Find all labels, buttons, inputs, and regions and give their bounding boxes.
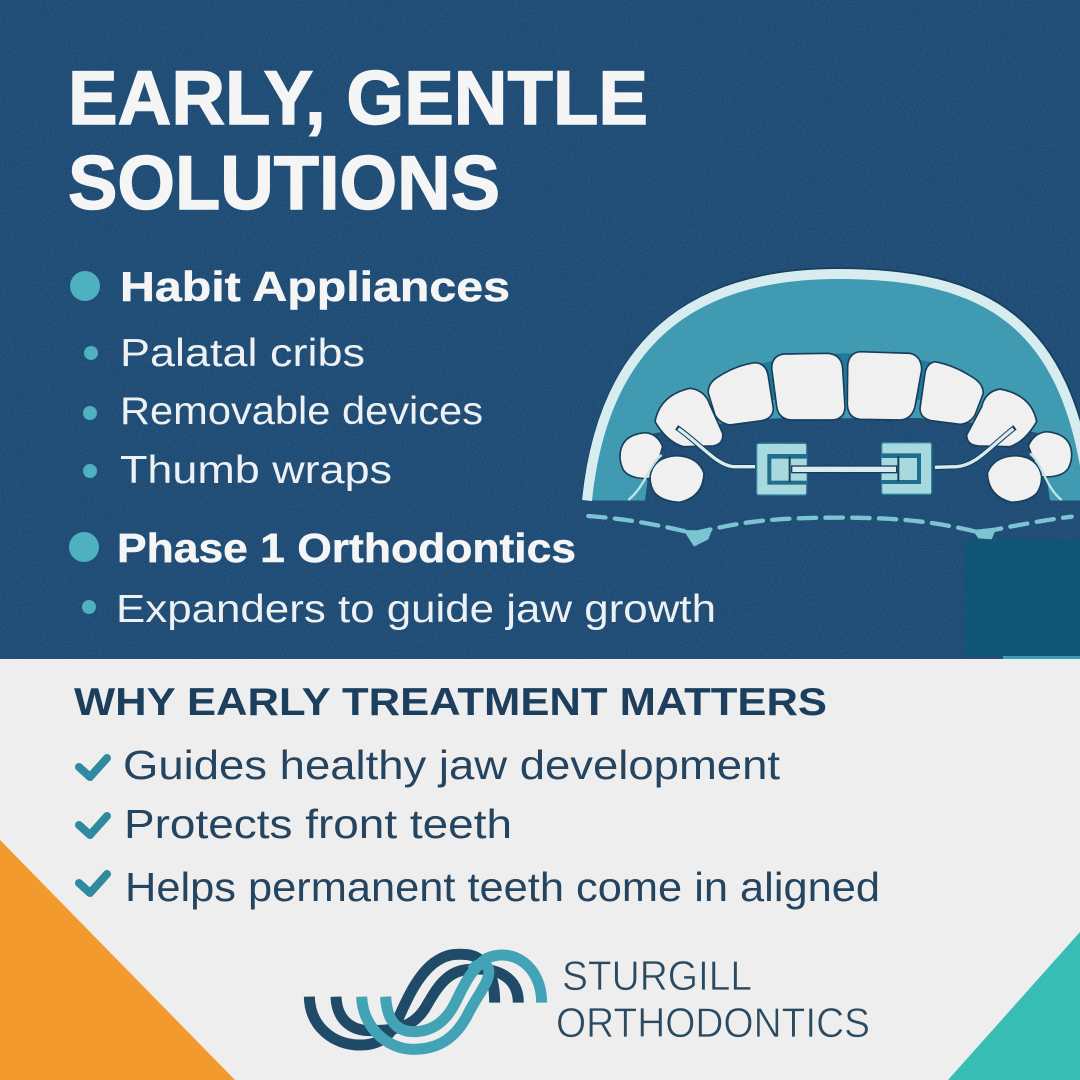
wire: left arm highlight [678, 429, 755, 467]
wire: left arm [677, 427, 755, 467]
wire: right arm highlight [935, 429, 1013, 467]
logo text: sturgill: STURGILL [562, 952, 752, 999]
teal strip [1003, 656, 1080, 659]
gum fill [587, 274, 1080, 500]
illustration: teeth and expander [588, 352, 1072, 547]
wire: right molar clasp [1030, 453, 1062, 500]
wire: left molar clasp [628, 455, 662, 500]
panel: top blue background [0, 0, 1080, 659]
item: removable devices: Removable devices [120, 390, 483, 433]
teeth [620, 352, 1072, 502]
teal outer wave [362, 964, 489, 1049]
title: EARLY, GENTLE [68, 56, 648, 141]
wires to molars [628, 427, 1062, 500]
panel: bottom light background [0, 659, 1080, 1080]
bracket slot [882, 453, 921, 484]
bullet: expanders [82, 600, 96, 614]
corner: teal triangle [948, 932, 1080, 1080]
heading: phase 1 orthodontics: Phase 1 Orthodontics [117, 525, 576, 571]
dark teal rectangle [965, 540, 1080, 656]
bracket block [771, 459, 807, 481]
heading: why early treatment matters: WHY EARLY TREATMENT MATTERS [74, 681, 827, 724]
tooth: right front molar [987, 456, 1042, 502]
illustration: gum arch [582, 268, 1080, 500]
tooth: right lateral [920, 362, 983, 424]
tooth: right central [847, 352, 922, 420]
bullet: habit appliances [70, 271, 100, 301]
icon: check 1 [79, 758, 107, 777]
tooth: right canine [967, 389, 1037, 447]
bullet: phase 1 orthodontics [69, 532, 99, 562]
palate [645, 417, 1050, 501]
item: expanders: Expanders to guide jaw growth [116, 588, 716, 631]
dashed line [588, 516, 1072, 533]
section: habit appliances list [70, 263, 510, 492]
right arrowhead [973, 527, 997, 539]
corner: orange triangle [0, 840, 235, 1080]
icon: check 3 [79, 874, 107, 893]
tooth: left lateral [708, 363, 773, 425]
dark outer wave [309, 954, 495, 1045]
bullet: thumb wraps [83, 464, 97, 478]
tooth: left canine [655, 388, 723, 447]
dark inner wave [336, 969, 518, 1031]
bracket block [882, 458, 917, 480]
dashed growth arrow [588, 516, 1072, 547]
item: thumb wraps: Thumb wraps [120, 449, 392, 492]
wire: right arm [935, 427, 1015, 467]
logo mark [309, 954, 542, 1049]
item: helps permanent teeth come in aligned: Helps permanent teeth come in aligned [125, 864, 880, 910]
icon: check 2 [79, 816, 107, 835]
logo: sturgill orthodontics [309, 952, 870, 1049]
bracket divider [897, 456, 899, 481]
tooth: left back molar [620, 433, 663, 479]
section: phase 1 orthodontics list [69, 525, 716, 631]
tooth: right back molar [1028, 432, 1072, 477]
bracket divider [789, 457, 791, 482]
bullet: removable devices [83, 406, 97, 420]
checklist [79, 742, 880, 910]
teal inner wave [386, 955, 542, 1032]
bracket frame [882, 443, 932, 494]
expander left bracket [757, 443, 807, 495]
tooth: left front molar [650, 456, 704, 502]
item: protects front teeth: Protects front teeth [124, 801, 512, 847]
heading: habit appliances: Habit Appliances [120, 263, 510, 310]
shadow behind front teeth [737, 353, 963, 400]
logo text: orthodontics: ORTHODONTICS [556, 999, 870, 1046]
expander right bracket [882, 443, 932, 494]
title [68, 56, 648, 226]
item: palatal cribs: Palatal cribs [120, 332, 365, 375]
arch dark outline [582, 268, 1080, 500]
bracket slot [767, 454, 807, 485]
bracket frame [757, 443, 807, 495]
expander screw bar [792, 466, 897, 473]
left arrowhead [683, 530, 712, 547]
title: SOLUTIONS [68, 141, 500, 226]
bullet: palatal cribs [84, 346, 98, 360]
tooth: left central [772, 353, 845, 420]
arch light rim [587, 274, 1080, 500]
item: guides healthy jaw development: Guides healthy jaw development [123, 742, 781, 788]
